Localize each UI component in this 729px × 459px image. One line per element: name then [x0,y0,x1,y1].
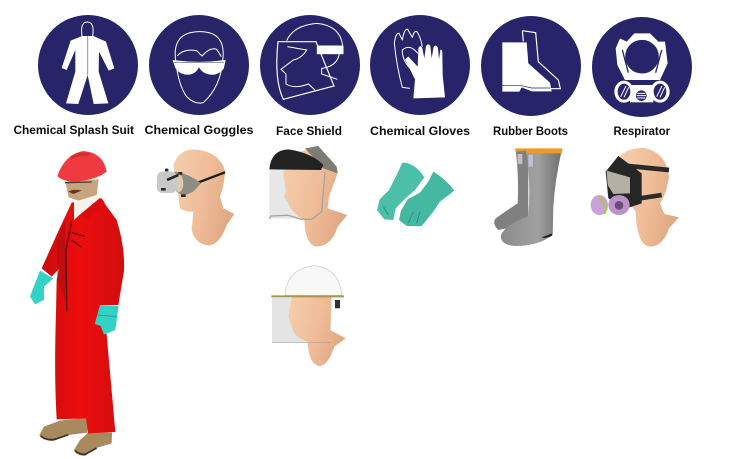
label: Chemical Goggles: Chemical Goggles [144,123,254,137]
icon: rubber boots [481,16,581,116]
figure: head with black-crown face shield [269,146,347,247]
figure: grey rubber boots [494,148,563,246]
label: Chemical Gloves: Chemical Gloves [370,124,470,138]
label: Respirator: Respirator [614,124,670,138]
icon: chemical gloves [370,15,470,115]
label: Chemical Splash Suit: Chemical Splash Suit [14,123,134,137]
icon: respirator [592,17,692,117]
figure: head with full-face respirator [591,148,679,247]
icon: chemical splash suit [38,15,138,115]
figure: teal chemical gloves [377,163,454,226]
label: Face Shield: Face Shield [276,124,342,138]
figure: head with chemical goggles [157,149,234,245]
label: Rubber Boots: Rubber Boots [493,124,568,138]
figure: worker in red chemical splash suit [30,151,124,456]
icon: chemical goggles [149,15,249,115]
figure: head with hard hat and face shield [271,266,346,366]
icon: face shield [260,15,360,115]
